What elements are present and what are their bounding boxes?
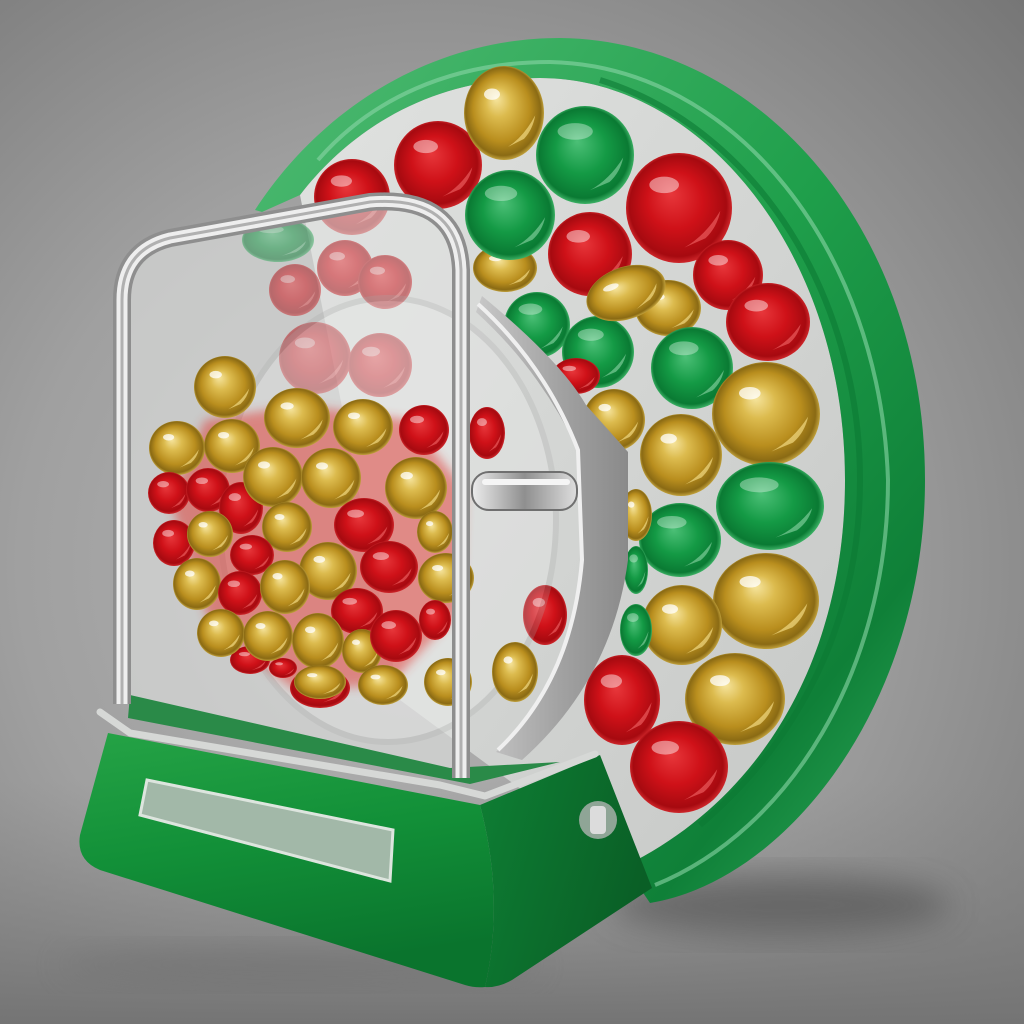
- wheel balls: [314, 66, 824, 813]
- base: green body: [79, 733, 652, 987]
- keyhole lock: [579, 801, 617, 839]
- cast shadow: [610, 875, 950, 935]
- glass case chrome frame: [122, 201, 461, 778]
- drum: transparent sphere: [220, 298, 556, 742]
- green floor under glass: [128, 695, 560, 784]
- faint back balls behind glass: [242, 218, 412, 397]
- floor shading: [0, 780, 1024, 1024]
- wheel: green ring: [255, 38, 925, 903]
- drum balls: [148, 356, 538, 708]
- base label window: [140, 780, 393, 881]
- drum red glow behind balls: [170, 405, 465, 690]
- axle handle: [472, 472, 577, 510]
- silver arc support: [476, 296, 628, 760]
- wheel: clear centre: [300, 78, 845, 866]
- base silver rim: [100, 712, 595, 796]
- glass case pane: [120, 202, 462, 775]
- base shadow: [60, 947, 540, 983]
